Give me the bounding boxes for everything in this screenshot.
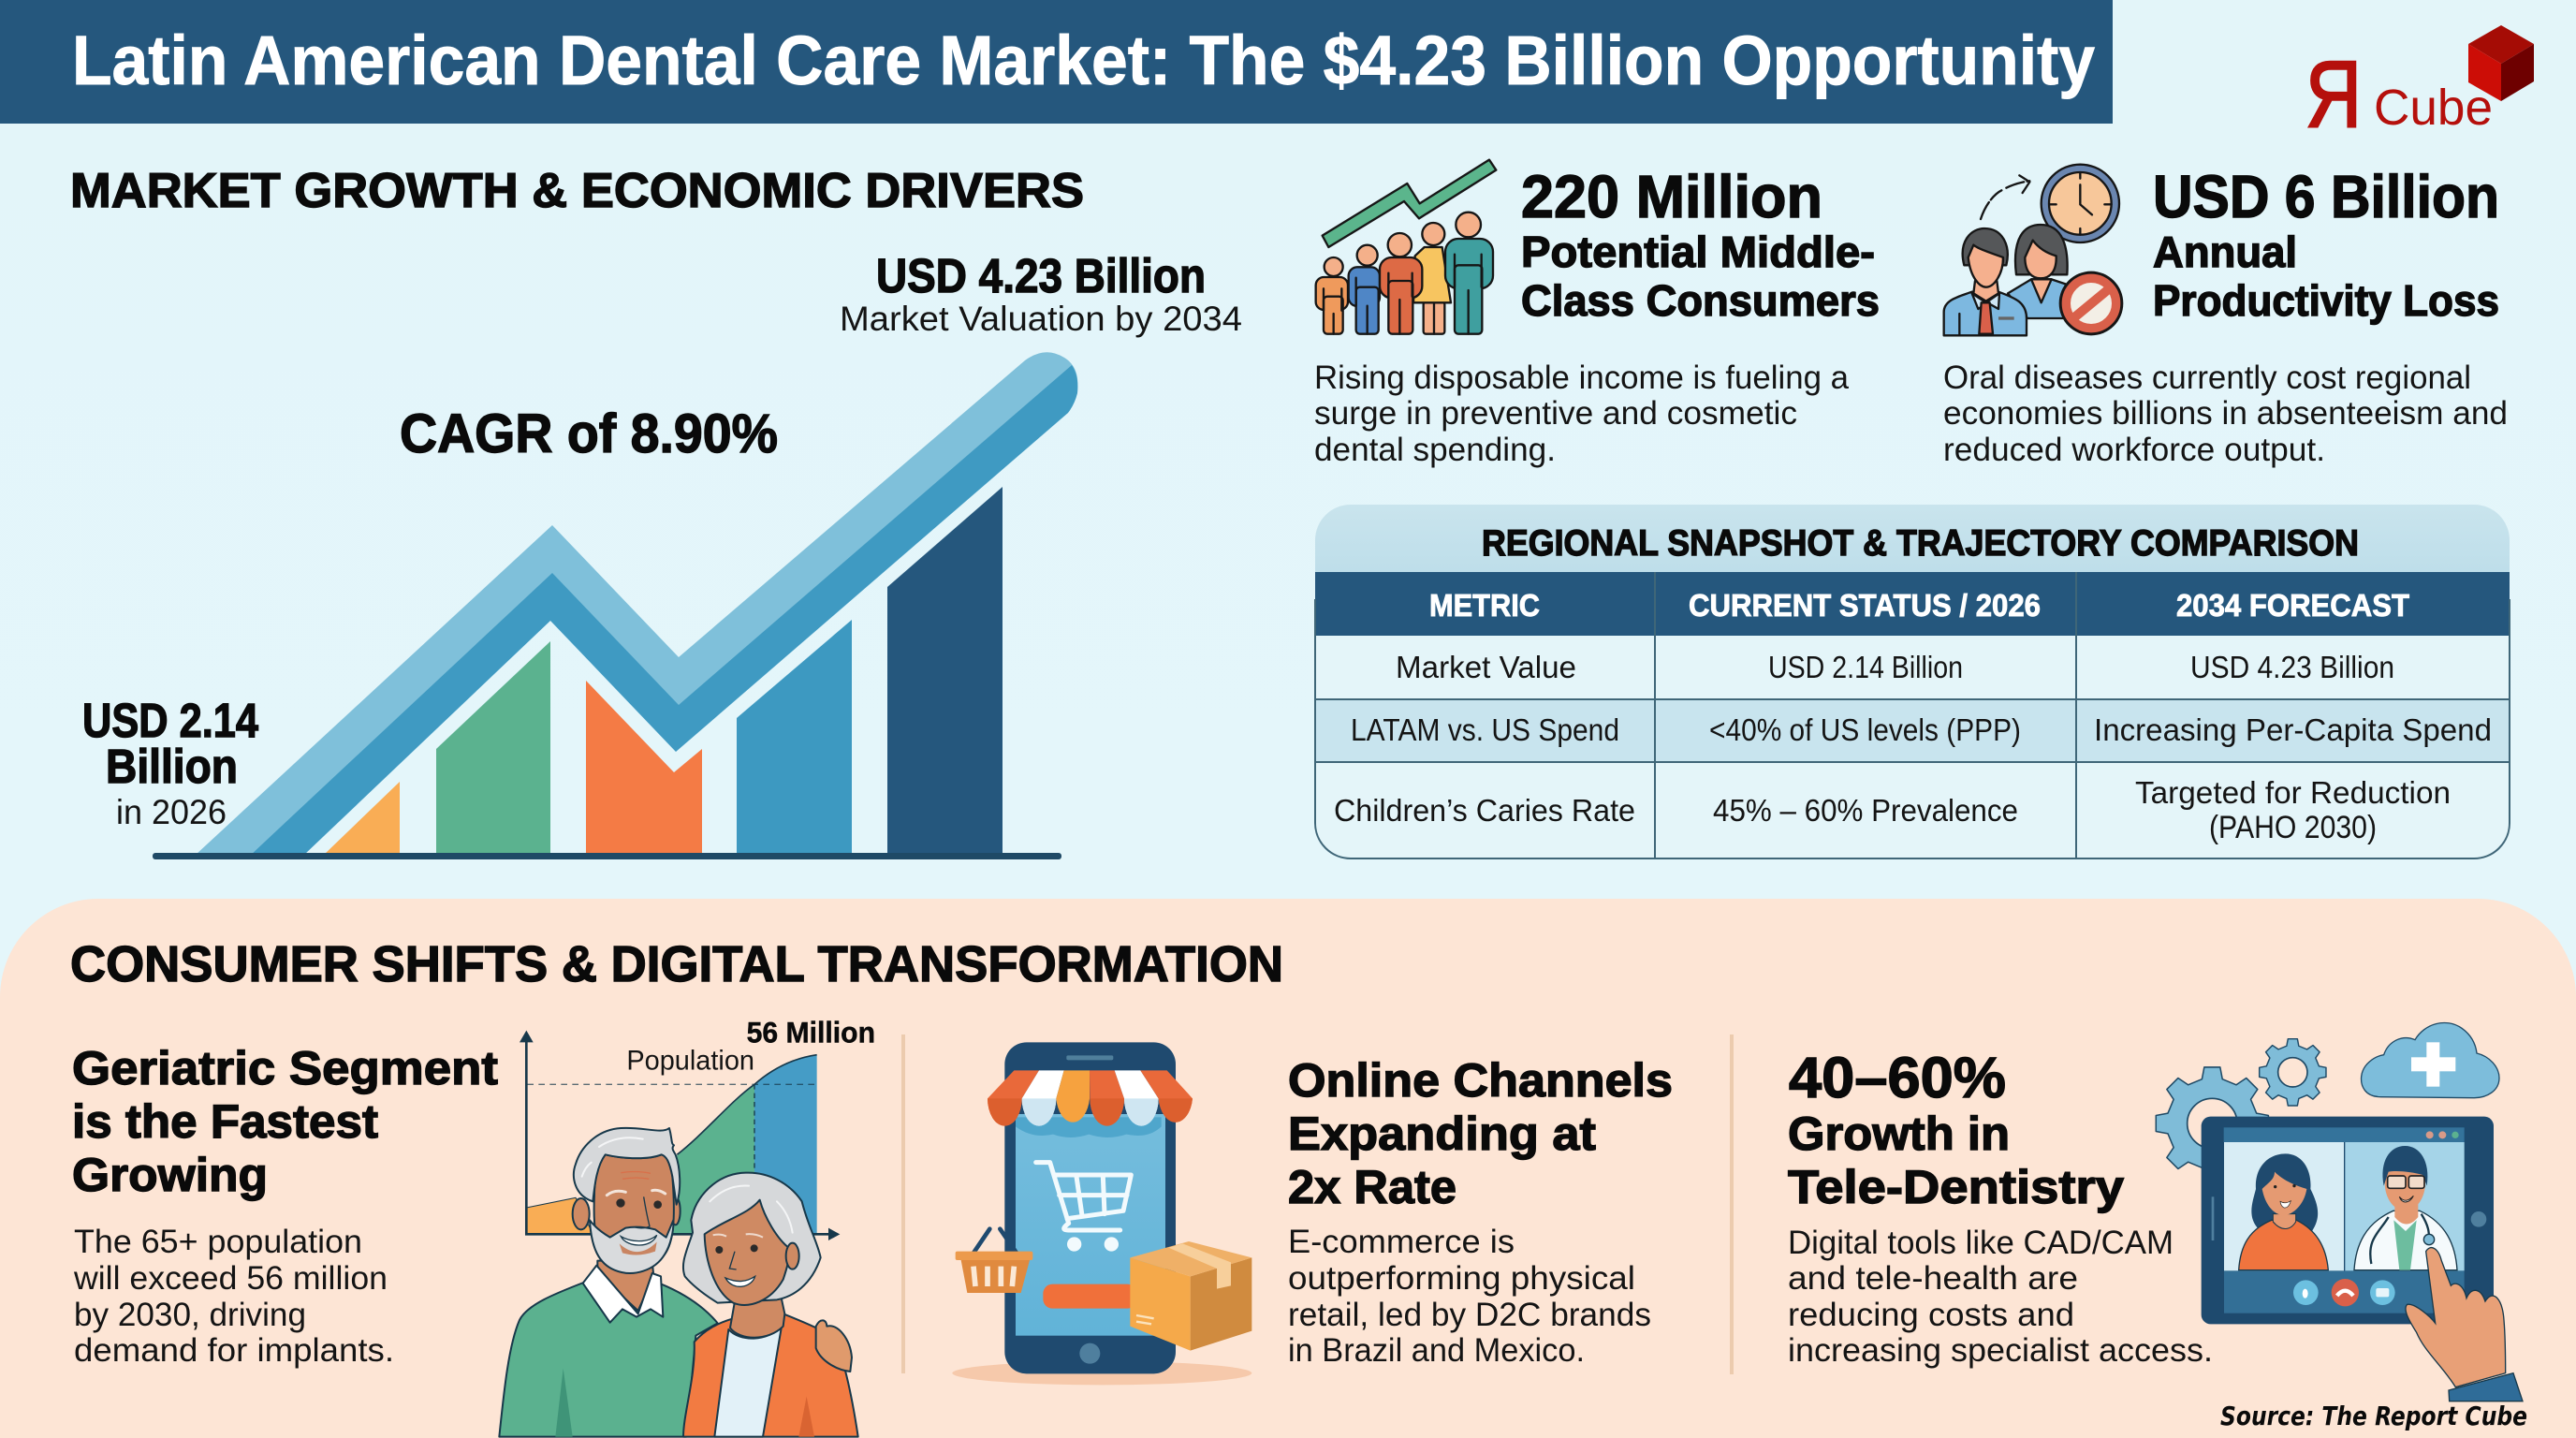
CAGR label: CAGR of 8.90% — [400, 404, 778, 464]
row: children's caries rate: Children’s Caries Rate — [1334, 793, 1635, 828]
online channels heading: Online Channels — [1288, 1054, 1673, 1107]
population area chart: 56 Million — [747, 1016, 875, 1049]
description: oral diseases: reduced workforce output. — [1943, 432, 2325, 468]
description: oral diseases — [1943, 360, 2508, 468]
stat text: 220 million: Class Consumers — [1521, 276, 1880, 325]
stat text: 220 million: Potential Middle- — [1521, 227, 1875, 276]
tablet — [2202, 1117, 2494, 1324]
row: market value — [1396, 650, 2394, 684]
stat text: USD 6 billion: Annual — [2153, 227, 2297, 276]
tele-dentistry description — [1788, 1225, 2213, 1369]
table title: REGIONAL SNAPSHOT & TRAJECTORY COMPARISON — [1482, 523, 2359, 564]
gears — [2156, 1039, 2326, 1180]
tele-dentistry description: Digital tools like CAD/CAM — [1788, 1225, 2174, 1261]
call buttons — [2293, 1279, 2395, 1306]
panel: market growth — [70, 164, 1242, 859]
icon: shopping phone — [952, 1042, 1251, 1385]
population area chart: Population — [626, 1046, 754, 1077]
stat: 220 million — [1314, 160, 1880, 468]
divider — [1730, 1034, 1734, 1374]
population chart and senior couple — [499, 1016, 875, 1437]
hand — [2406, 1248, 2523, 1401]
end value label — [840, 249, 1242, 338]
row: market value: Market Value — [1396, 650, 1576, 684]
start value label: Billion — [106, 740, 238, 793]
icon: family and trend arrow — [1316, 160, 1496, 334]
row: market value: USD 4.23 Billion — [2190, 650, 2394, 684]
tele-dentistry description: and tele-health are — [1788, 1260, 2078, 1297]
stat text: 220 million: 220 Million — [1521, 163, 1822, 230]
geriatric description: will exceed 56 million — [73, 1260, 388, 1297]
table header row: 2034 FORECAST — [2176, 588, 2409, 623]
table header row — [1429, 588, 2409, 623]
row: LATAM vs US spend: LATAM vs. US Spend — [1351, 712, 1619, 747]
stat: USD 6 billion — [1943, 163, 2508, 468]
end value label: Market Valuation by 2034 — [840, 300, 1242, 338]
description: disposable income: surge in preventive and cosmetic — [1314, 395, 1797, 432]
geriatric description: demand for implants. — [74, 1332, 394, 1369]
stat text: 220 million — [1521, 163, 1880, 325]
doctor — [2354, 1146, 2457, 1270]
online channels description: E-commerce is — [1288, 1224, 1515, 1260]
online channels description — [1288, 1224, 1651, 1369]
heading: market growth: MARKET GROWTH & ECONOMIC DRIVERS — [70, 164, 1084, 218]
panel: consumer shifts — [0, 899, 2576, 1438]
tele-dentistry description: increasing specialist access. — [1788, 1332, 2213, 1369]
title banner — [0, 0, 2113, 124]
row: market value: USD 2.14 Billion — [1768, 650, 1963, 684]
start value label: in 2026 — [116, 793, 227, 831]
table header row: METRIC — [1429, 588, 1540, 623]
stat text: USD 6 billion — [2153, 163, 2499, 325]
online channels heading: Expanding at — [1288, 1108, 1596, 1160]
online channels heading: 2x Rate — [1288, 1161, 1456, 1213]
icon: tele-health tablet — [2156, 1022, 2523, 1401]
table header row: CURRENT STATUS / 2026 — [1689, 588, 2041, 623]
stat text: USD 6 billion: Productivity Loss — [2153, 276, 2499, 325]
geriatric description: The 65+ population — [74, 1224, 362, 1260]
geriatric description — [73, 1224, 394, 1369]
online channels description: in Brazil and Mexico. — [1288, 1332, 1585, 1369]
online channels description: outperforming physical — [1288, 1260, 1635, 1297]
growth chart — [153, 352, 1077, 859]
icon: workers, clock and prohibition sign — [1944, 165, 2123, 335]
row: children's caries rate — [1334, 775, 2451, 845]
illustration: senior man — [499, 1128, 718, 1437]
geriatric heading: Growing — [72, 1149, 268, 1201]
row: LATAM vs US spend — [1351, 712, 2492, 747]
description: disposable income: dental spending. — [1314, 432, 1556, 468]
divider — [901, 1034, 905, 1373]
online channels description: retail, led by D2C brands — [1288, 1297, 1651, 1333]
tele-dentistry heading — [1788, 1046, 2124, 1213]
patient — [2239, 1153, 2328, 1270]
cloud with plus — [2362, 1022, 2499, 1098]
row: children's caries rate: (PAHO 2030) — [2209, 810, 2377, 845]
logo: RCube: Cube — [2374, 80, 2493, 136]
start value label — [82, 694, 259, 831]
tele-dentistry heading: Tele-Dentistry — [1788, 1161, 2124, 1213]
tele-dentistry description: reducing costs and — [1788, 1297, 2074, 1333]
logo: RCube — [2305, 25, 2534, 147]
description: oral diseases: Oral diseases currently cost regional — [1943, 360, 2471, 396]
heading: consumer shifts: CONSUMER SHIFTS & DIGITAL TRANSFORMATION — [70, 936, 1283, 992]
tele-dentistry heading: 40–60% — [1789, 1046, 2006, 1109]
panel: comparison table — [1315, 505, 2510, 858]
row: children's caries rate: Targeted for Reduction — [2135, 775, 2451, 810]
logo: RCube: Я — [2305, 42, 2362, 147]
title banner: Latin American Dental Care Market: The $4.23 Billion Opportunity — [72, 22, 2095, 99]
illustration: senior woman — [683, 1173, 858, 1437]
row: LATAM vs US spend: Increasing Per-Capita Spend — [2094, 712, 2492, 747]
stat text: USD 6 billion: USD 6 Billion — [2153, 163, 2499, 230]
online channels heading — [1288, 1054, 1673, 1213]
row: children's caries rate: 45% – 60% Prevalence — [1713, 793, 2018, 828]
description: disposable income: Rising disposable income is fueling a — [1314, 360, 1850, 396]
geriatric heading — [72, 1042, 498, 1201]
tele-dentistry heading: Growth in — [1788, 1108, 2010, 1160]
geriatric description: by 2030, driving — [74, 1297, 306, 1333]
geriatric heading: is the Fastest — [72, 1095, 378, 1148]
population area chart — [520, 1016, 875, 1240]
description: disposable income — [1314, 360, 1850, 468]
row: LATAM vs US spend: <40% of US levels (PPP) — [1709, 712, 2021, 747]
end value label: USD 4.23 Billion — [876, 249, 1206, 302]
geriatric heading: Geriatric Segment — [72, 1042, 498, 1094]
start value label: USD 2.14 — [82, 694, 259, 747]
description: oral diseases: economies billions in absenteeism and — [1943, 395, 2508, 432]
